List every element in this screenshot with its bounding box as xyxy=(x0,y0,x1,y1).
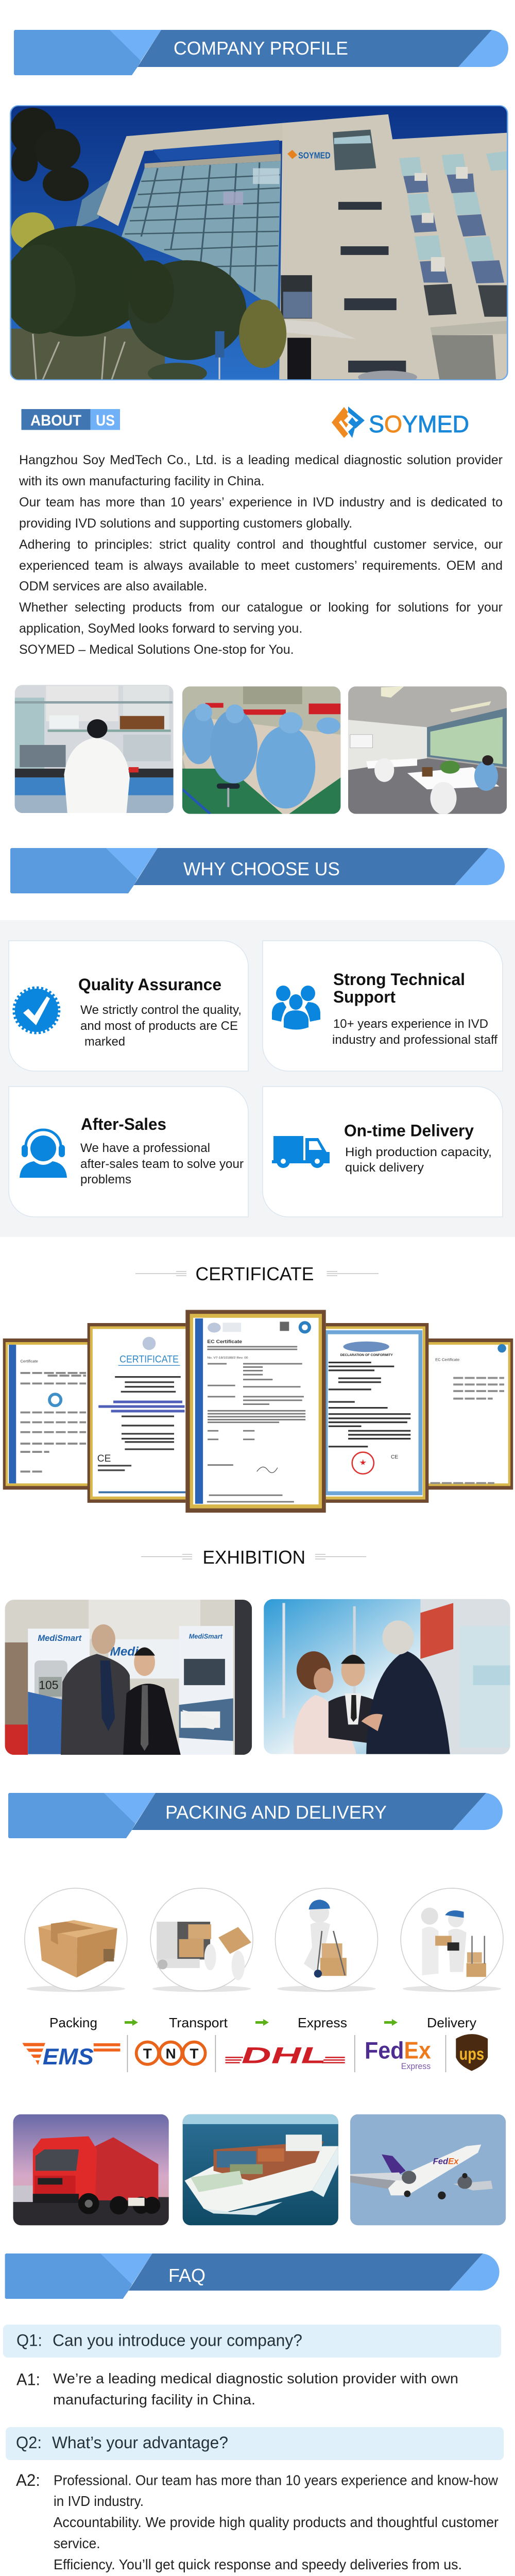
FAQ 2: Professional. Our team has more than 10 years experience and know-how xyxy=(54,2472,499,2488)
certificate 2 xyxy=(88,1323,185,1503)
heading: why choose us: WHY CHOOSE US xyxy=(183,858,340,879)
description: and most of products are CE xyxy=(80,1019,238,1033)
photo: exhibition booth with two men: MediSmart xyxy=(189,1632,223,1640)
certificate 4: CE xyxy=(391,1454,398,1460)
title: Support xyxy=(333,988,396,1006)
step: express courier xyxy=(275,1888,377,1991)
card: after-sales xyxy=(9,1087,248,1217)
step: delivery handover xyxy=(401,1888,503,1991)
FAQ 2: Efficiency. You’ll get quick response and speedy deliveries from us. xyxy=(54,2556,462,2572)
badge: about us xyxy=(22,409,120,430)
logo: soymed: SOYMED xyxy=(369,411,469,437)
certificate 3: No. V7-18/10188/2 Rev. 00 xyxy=(207,1357,248,1360)
title: After-Sales xyxy=(81,1115,166,1133)
photo: company building xyxy=(3,106,507,384)
icon: people xyxy=(272,986,320,1029)
description: 10+ years experience in IVD xyxy=(333,1017,488,1031)
title: Quality Assurance xyxy=(78,975,221,994)
process labels with arrows xyxy=(49,2015,476,2030)
certificate 4 xyxy=(326,1323,428,1503)
certificate 2: CE xyxy=(97,1453,111,1464)
photo: laboratory xyxy=(15,685,174,813)
title: Strong Technical xyxy=(333,970,465,989)
heading: company profile: COMPANY PROFILE xyxy=(174,38,348,59)
text block: about us paragraph: providing IVD solutions and supporting customers globally. xyxy=(19,516,352,531)
photo: container ship xyxy=(183,2114,338,2225)
text block: about us paragraph: SOYMED – Medical Solutions One-stop for You. xyxy=(19,642,294,657)
photo: exhibition booth with two men: 105 xyxy=(39,1679,59,1692)
photo: exhibition booth with two men: Medi xyxy=(110,1645,139,1658)
logo icon xyxy=(332,406,365,438)
logo: UPS xyxy=(456,2034,488,2071)
heading: certificate: CERTIFICATE xyxy=(196,1263,314,1284)
text block: about us paragraph: with its own manufacturing facility in China. xyxy=(19,474,265,488)
card: quality assurance xyxy=(9,941,248,1071)
card: strong technical support xyxy=(263,941,503,1071)
panel: why choose us background xyxy=(0,920,515,1237)
heading: exhibition xyxy=(141,1547,366,1568)
arrow xyxy=(125,2019,138,2026)
logo: DHL: DHL xyxy=(242,2043,326,2068)
step: packing box xyxy=(25,1888,127,1991)
logo: UPS: ups xyxy=(459,2045,484,2064)
logo: TNT: T xyxy=(190,2045,199,2061)
photo: cargo plane: FedEx xyxy=(433,2157,459,2166)
text block: about us paragraph: Adhering to principles: strict quality control and thoughtful customer service, our xyxy=(19,537,503,552)
FAQ 1: Q1: xyxy=(16,2331,42,2350)
logo: FedEx: Express xyxy=(401,2061,431,2071)
banner: why choose us xyxy=(10,848,505,893)
certificate 5: EC Certificate xyxy=(435,1357,459,1362)
certificate 3 xyxy=(185,1310,326,1513)
heading: packing and delivery: PACKING AND DELIVERY xyxy=(165,1802,387,1823)
FAQ 1 xyxy=(3,2325,501,2408)
description: problems xyxy=(80,1173,131,1187)
certificate 3: EC Certificate xyxy=(207,1339,242,1345)
FAQ 2: in IVD industry. xyxy=(54,2493,144,2509)
text block: about us paragraph: Our team has more than 10 years’ experience in IVD industry and is dedicated to xyxy=(19,495,503,510)
FAQ 2 xyxy=(6,2427,504,2572)
heading: exhibition: EXHIBITION xyxy=(203,1547,305,1568)
description: after-sales team to solve your xyxy=(80,1157,244,1171)
FAQ 1: Can you introduce your company? xyxy=(53,2331,302,2350)
badge: about us: ABOUT xyxy=(30,412,81,429)
certificate 1 xyxy=(3,1338,89,1489)
logo: TNT: T xyxy=(143,2045,152,2061)
photo: exhibition conversation xyxy=(264,1599,510,1754)
arrow xyxy=(255,2019,269,2026)
FAQ 2: A2: xyxy=(16,2471,40,2489)
logo: FedEx: Fed xyxy=(365,2037,404,2063)
FAQ 2: What’s your advantage? xyxy=(52,2433,228,2452)
label: transport: Transport xyxy=(169,2015,228,2030)
photo: office xyxy=(348,686,507,815)
description: marked xyxy=(84,1035,125,1049)
description: quick delivery xyxy=(345,1161,424,1175)
label: express: Express xyxy=(298,2015,347,2030)
photo: cargo plane xyxy=(350,2114,506,2225)
icon: quality badge xyxy=(14,988,59,1033)
description: We have a professional xyxy=(80,1141,210,1155)
text block: about us paragraph: Whether selecting products from our catalogue or looking for solutions for your xyxy=(19,600,503,615)
arrow xyxy=(384,2019,398,2026)
banner: packing and delivery xyxy=(8,1793,503,1838)
text block: about us paragraph: application, SoyMed looks forward to serving you. xyxy=(19,621,302,636)
FAQ 1: A1: xyxy=(16,2370,40,2389)
text block: about us paragraph: ODM services are also available. xyxy=(19,579,207,594)
certificate 1: Certificate xyxy=(21,1359,38,1364)
FAQ 1: manufacturing facility in China. xyxy=(53,2392,255,2408)
photo: exhibition booth with two men: MediSmart xyxy=(38,1633,82,1643)
label: packing: Packing xyxy=(49,2015,97,2030)
icon: headset agent xyxy=(20,1130,67,1178)
logo: EMS: EMS xyxy=(43,2044,94,2070)
description: industry and professional staff xyxy=(332,1033,497,1047)
certificate 5 xyxy=(427,1338,513,1489)
logo: FedEx: Ex xyxy=(404,2037,431,2063)
heading: FAQ: FAQ xyxy=(168,2265,205,2286)
text block: about us paragraph: Hangzhou Soy MedTech Co., Ltd. is a leading medical diagnostic solution provider xyxy=(19,453,503,467)
FAQ 1: We’re a leading medical diagnostic solution provider with own xyxy=(53,2370,458,2386)
step: transport loading xyxy=(150,1888,253,1991)
photo: clean room xyxy=(182,686,340,814)
badge: about us: US xyxy=(96,412,115,429)
photo: exhibition booth with two men xyxy=(5,1600,252,1755)
icon: truck xyxy=(272,1136,330,1168)
carrier logos xyxy=(22,2034,488,2072)
text block: about us paragraph: experienced team is always available to meet customers’ requirements. OEM and xyxy=(19,558,503,573)
FAQ 2: Q2: xyxy=(16,2433,42,2452)
ground shadows xyxy=(27,1986,501,1992)
logo: FedEx xyxy=(365,2037,431,2071)
FAQ 2: service. xyxy=(54,2535,100,2551)
banner: company profile xyxy=(14,30,508,75)
description: We strictly control the quality, xyxy=(80,1003,242,1017)
card: on-time delivery xyxy=(263,1087,503,1217)
banner: FAQ xyxy=(5,2253,500,2299)
title: On-time Delivery xyxy=(344,1121,474,1140)
photo: red truck xyxy=(13,2114,169,2225)
delivery process illustrations xyxy=(25,1888,503,1992)
logo: EMS xyxy=(22,2043,120,2070)
building sign xyxy=(287,149,331,159)
logo: TNT: N xyxy=(166,2045,176,2061)
text block: about us paragraph xyxy=(19,453,503,657)
label: delivery: Delivery xyxy=(427,2015,476,2030)
logo: TNT xyxy=(136,2042,205,2064)
FAQ 2: Accountability. We provide high quality products and thoughtful customer xyxy=(54,2514,499,2530)
certificate 2: CERTIFICATE xyxy=(119,1354,179,1365)
description: High production capacity, xyxy=(345,1145,492,1159)
logo: DHL xyxy=(226,2043,345,2068)
logo: soymed xyxy=(332,406,469,438)
building sign: SOYMED xyxy=(298,151,331,161)
heading: certificate xyxy=(135,1263,379,1284)
certificates xyxy=(3,1310,513,1513)
certificate 4: DECLARATION OF CONFORMITY xyxy=(340,1353,393,1357)
